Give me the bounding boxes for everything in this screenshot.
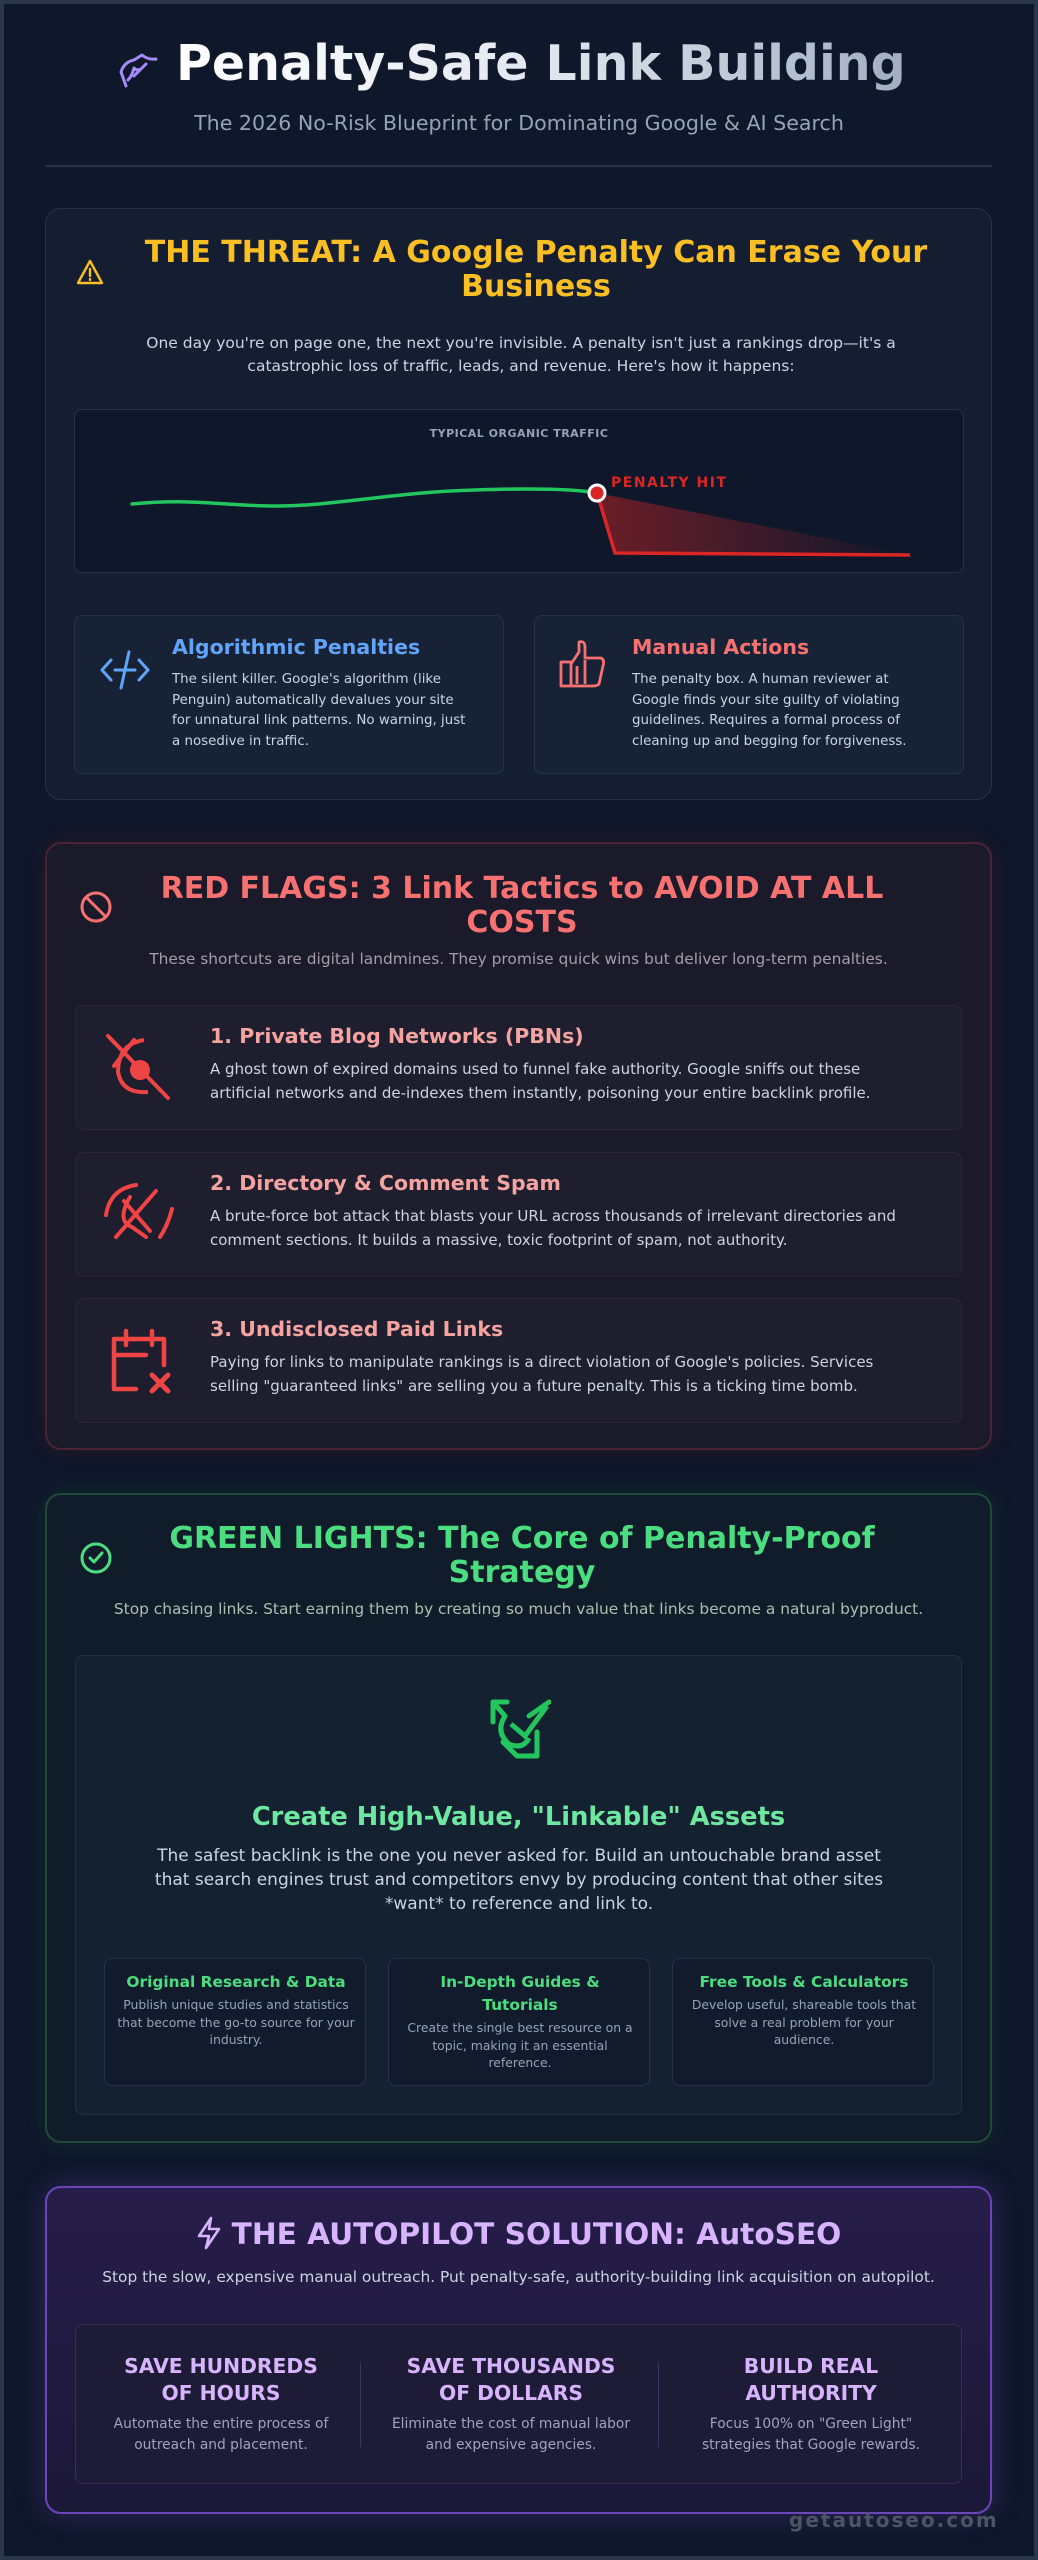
- card: manual: [534, 615, 964, 774]
- icon: bolt: [198, 2216, 220, 2250]
- benefit: hours: Automate the entire process of: [114, 2416, 328, 2432]
- panel: autopilot: [45, 2186, 992, 2514]
- panel: red flags: [45, 842, 992, 1450]
- icon: ban: [80, 892, 112, 922]
- card: research: Original Research & Data: [126, 1973, 346, 1991]
- card: algorithmic: [74, 615, 504, 774]
- benefits box: [75, 2324, 962, 2484]
- benefit: authority: [702, 2354, 920, 2453]
- icon: code: [100, 650, 150, 690]
- icon: calendar-x: [112, 1328, 170, 1394]
- item: PBNs: A ghost town of expired domains used to funnel fake authority. Google sniffs out these artificial networks and de-indexes them instantly, poisoning your entire backlink profile.: [210, 1060, 870, 1102]
- benefit: dollars: SAVE THOUSANDS: [407, 2354, 615, 2378]
- benefit: hours: OF HOURS: [161, 2381, 281, 2405]
- card: tools: Develop useful, shareable tools that solve a real problem for your audience.: [692, 1997, 916, 2047]
- benefit: authority: strategies that Google rewards.: [702, 2437, 920, 2453]
- card: tools: Free Tools & Calculators: [700, 1973, 908, 1991]
- text: The safest backlink is the one you never asked for. Build an untouchable brand asset that search engines trust and competitors envy by producing content that other sites *want* to reference and link to.: [155, 1846, 883, 1914]
- benefit: dollars: Eliminate the cost of manual labor: [392, 2416, 630, 2432]
- icon: hand: [120, 54, 158, 88]
- icon: no-comment: [104, 1183, 174, 1240]
- header: [120, 35, 906, 135]
- icon: linkable asset: [490, 1700, 551, 1758]
- benefit: authority: Focus 100% on "Green Light": [710, 2416, 912, 2432]
- card: research: [104, 1958, 366, 2086]
- icon: no-eye: [106, 1034, 170, 1100]
- card: algorithmic: Algorithmic Penalties: [172, 635, 420, 659]
- card: guides: Create the single best resource on a topic, making it an essential reference.: [407, 2020, 633, 2070]
- panel: green lights: [45, 1493, 992, 2143]
- benefit: dollars: and expensive agencies.: [426, 2437, 596, 2453]
- card: guides: In-Depth Guides & Tutorials: [440, 1973, 600, 2014]
- card: guides: [388, 1958, 650, 2086]
- chart: traffic: [74, 409, 964, 573]
- benefit: hours: outreach and placement.: [134, 2437, 308, 2453]
- heading: linkable assets: Create High-Value, "Linkable" Assets: [252, 1802, 785, 1832]
- benefit: authority: BUILD REAL: [744, 2354, 878, 2378]
- benefit: hours: SAVE HUNDREDS: [124, 2354, 318, 2378]
- icon: warning: [76, 260, 104, 284]
- item: paid links: Paying for links to manipulate rankings is a direct violation of Google's policies. Services selling "guaranteed links" are selling you a future penalty. This is a ticking time bomb.: [210, 1353, 873, 1395]
- heading: THE THREAT: A Google Penalty Can Erase Your Business: [145, 235, 927, 304]
- subtitle: The 2026 No-Risk Blueprint for Dominating Google & AI Search: [194, 111, 844, 135]
- watermark: getautoseo.com: [789, 2508, 999, 2532]
- item: PBNs: [75, 1005, 962, 1130]
- asset box: [75, 1655, 962, 2115]
- benefit: dollars: OF DOLLARS: [439, 2381, 583, 2405]
- chart: traffic: TYPICAL ORGANIC TRAFFIC: [430, 427, 608, 440]
- card: research: Publish unique studies and statistics that become the go-to source for your industry.: [117, 1997, 355, 2047]
- item: spam: A brute-force bot attack that blasts your URL across thousands of irrelevant directories and comment sections. It builds a massive, toxic footprint of spam, not authority.: [210, 1207, 896, 1249]
- benefit: dollars: [392, 2354, 630, 2453]
- card: tools: [672, 1958, 934, 2086]
- card: algorithmic: The silent killer. Google's algorithm (like Penguin) automatically devalues your site for unnatural link patterns. No warning, just a nosedive in traffic.: [172, 672, 465, 749]
- chart: traffic: PENALTY HIT: [611, 475, 728, 491]
- benefit: authority: AUTHORITY: [745, 2381, 877, 2405]
- item: spam: 2. Directory & Comment Spam: [210, 1171, 561, 1195]
- item: PBNs: 1. Private Blog Networks (PBNs): [210, 1024, 584, 1048]
- card: manual: The penalty box. A human reviewer at Google finds your site guilty of violating guidelines. Requires a formal process of cleaning up and begging for forgiveness.: [632, 672, 907, 749]
- heading: RED FLAGS: 3 Link Tactics to AVOID AT ALL COSTS: [161, 871, 883, 940]
- subtitle: Stop chasing links. Start earning them by creating so much value that links become a natural byproduct.: [114, 1600, 923, 1618]
- heading: THE AUTOPILOT SOLUTION: AutoSEO: [232, 2217, 841, 2251]
- panel: threat: [45, 208, 992, 800]
- card: manual: Manual Actions: [632, 635, 809, 659]
- subtitle: Stop the slow, expensive manual outreach. Put penalty-safe, authority-building link acquisition on autopilot.: [102, 2268, 935, 2286]
- icon: check: [80, 1542, 112, 1574]
- subtitle: These shortcuts are digital landmines. They promise quick wins but deliver long-term penalties.: [149, 950, 888, 968]
- icon: thumb: [560, 640, 606, 688]
- item: paid links: 3. Undisclosed Paid Links: [210, 1317, 503, 1341]
- item: spam: [75, 1152, 962, 1277]
- intro text: One day you're on page one, the next you're invisible. A penalty isn't just a rankings drop—it's a catastrophic loss of traffic, leads, and revenue. Here's how it happens:: [146, 334, 896, 375]
- heading: GREEN LIGHTS: The Core of Penalty-Proof Strategy: [169, 1521, 875, 1590]
- title: Penalty-Safe Link Building: [176, 35, 906, 92]
- item: paid links: [75, 1298, 962, 1423]
- benefit: hours: [114, 2354, 329, 2453]
